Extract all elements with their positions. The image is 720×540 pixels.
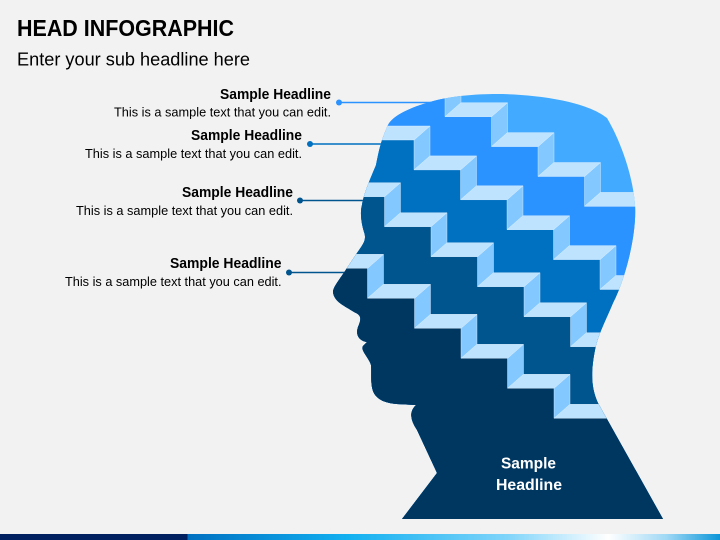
layer: fourth region — [333, 196, 663, 519]
callout 3 — [76, 185, 363, 218]
title: HEAD INFOGRAPHIC — [17, 15, 234, 41]
subtitle: Enter your sub headline here — [17, 48, 250, 70]
neck label: Sample — [501, 456, 556, 472]
callout 4 — [65, 256, 348, 289]
layer: bottom region — [333, 268, 663, 519]
callout 1: Sample Headline — [220, 87, 331, 103]
layer: second region — [320, 85, 670, 525]
layer: third region — [333, 140, 663, 518]
callout 4: This is a sample text that you can edit. — [65, 274, 282, 289]
staircase 1 — [444, 96, 635, 207]
callout 1: This is a sample text that you can edit. — [114, 104, 331, 120]
neck label: Headline — [496, 477, 562, 494]
head silhouette with staircase layers — [320, 85, 670, 525]
staircase 4 — [346, 254, 607, 419]
callout 2: This is a sample text that you can edit. — [85, 146, 302, 161]
callout 1 — [114, 87, 432, 120]
callout 3: Sample Headline — [182, 185, 293, 201]
callout 4: Sample Headline — [170, 256, 282, 272]
callout 2: Sample Headline — [191, 128, 302, 144]
callout 2 — [85, 128, 383, 161]
neck label — [496, 456, 562, 494]
staircase 3 — [364, 182, 600, 347]
callout 3: This is a sample text that you can edit. — [76, 203, 293, 218]
layer: top region — [320, 85, 670, 525]
bottom bar — [0, 534, 720, 540]
staircase 2 — [382, 126, 624, 290]
